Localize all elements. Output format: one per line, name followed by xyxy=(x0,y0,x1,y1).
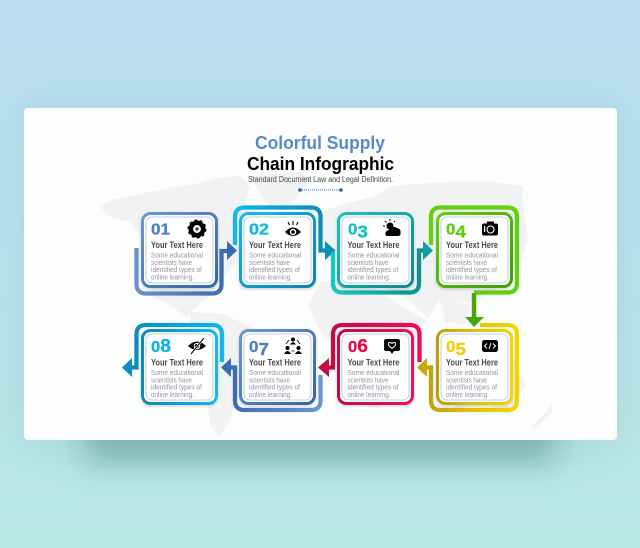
icon: people network xyxy=(284,338,302,354)
divider xyxy=(298,188,343,192)
number 01: 01 xyxy=(151,222,170,238)
title block xyxy=(247,132,394,192)
number 07: 0 xyxy=(249,339,258,356)
number 06: 06 xyxy=(348,336,368,356)
text 02 xyxy=(249,240,301,282)
step 07 xyxy=(221,330,320,410)
number 03: 0 xyxy=(348,222,357,238)
number 03: 3 xyxy=(357,222,368,242)
box 08 xyxy=(142,330,216,404)
card bottom shadow xyxy=(85,405,555,463)
box 01 xyxy=(142,214,216,286)
connector arrow 01 xyxy=(136,241,237,294)
white slide panel xyxy=(24,108,617,440)
text 06 xyxy=(348,358,400,399)
number 04: 0 xyxy=(446,222,455,238)
title line 2: Chain Infographic xyxy=(247,153,394,174)
icon: sun and cloud xyxy=(383,219,401,236)
box 06 xyxy=(338,330,412,404)
connector arrow 03 xyxy=(333,241,433,292)
number 05: 0 xyxy=(446,339,455,356)
step 03 xyxy=(333,214,433,292)
step 06 xyxy=(318,325,420,404)
icon: camera xyxy=(482,222,498,236)
text 03 xyxy=(348,240,400,282)
box 02 xyxy=(240,214,314,286)
text 04 xyxy=(446,240,498,282)
connector arrow 04 xyxy=(431,208,517,327)
box 05 xyxy=(438,330,512,404)
text 07 xyxy=(249,358,301,399)
box 07 xyxy=(240,330,314,404)
step 04 xyxy=(431,208,517,327)
subtitle: Standard Document Law and Legal Definition. xyxy=(248,175,393,184)
text 01 xyxy=(151,240,203,282)
icon: crossed eye xyxy=(188,338,206,354)
step 02 xyxy=(235,208,336,286)
box 04 xyxy=(438,214,512,286)
number 04: 4 xyxy=(455,222,466,242)
step 08 xyxy=(122,325,222,404)
icon: gear xyxy=(189,221,205,237)
world map xyxy=(100,172,553,437)
box 03 xyxy=(338,214,412,286)
connector arrow 07 xyxy=(221,358,320,410)
text 05 xyxy=(446,358,498,399)
number 07: 7 xyxy=(258,339,269,359)
text 08 xyxy=(151,358,203,399)
connector arrow 08 xyxy=(122,325,222,377)
icon: chat heart xyxy=(384,339,400,354)
step 01 xyxy=(136,214,237,294)
title line 1: Colorful Supply xyxy=(255,132,386,153)
card soft halo xyxy=(20,100,620,450)
step 05 xyxy=(417,325,517,410)
connector arrow 06 xyxy=(318,325,420,377)
icon: eye xyxy=(285,221,301,236)
connector arrow 02 xyxy=(235,208,336,260)
number 08: 08 xyxy=(151,336,171,356)
connector arrow 05 xyxy=(417,325,517,410)
icon: code xyxy=(482,340,498,352)
number 02: 02 xyxy=(249,222,269,238)
number 05: 5 xyxy=(455,339,466,359)
